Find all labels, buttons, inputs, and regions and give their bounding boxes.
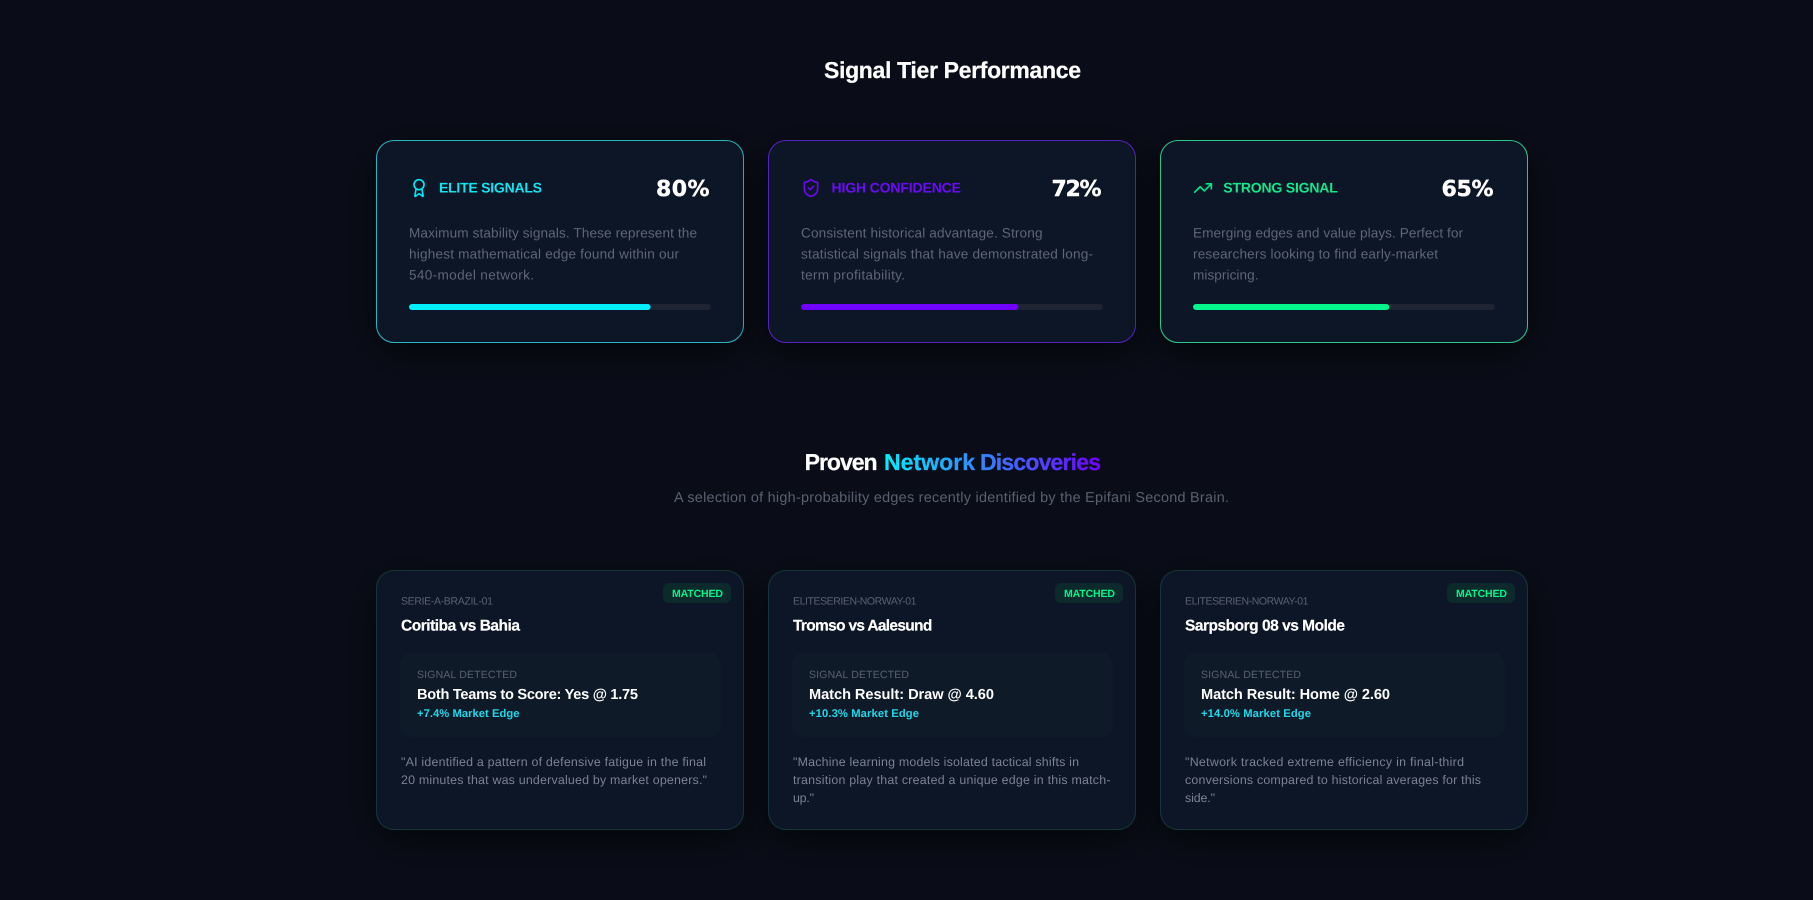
description: term profitability. (801, 267, 905, 282)
badge (1055, 583, 1123, 603)
tier name: STRONG SIGNAL (1223, 180, 1338, 196)
signal box: SIGNAL DETECTED (1201, 669, 1301, 681)
tier name: ELITE SIGNALS (439, 180, 542, 196)
quote: "Network tracked extreme efficiency in final-third (1185, 755, 1464, 769)
signal box (1184, 653, 1505, 737)
panel: strong signal (1160, 140, 1528, 342)
heading: Proven Network Discoveries (805, 449, 1101, 475)
description (1193, 225, 1463, 282)
description: Emerging edges and value plays. Perfect for (1193, 225, 1463, 240)
panel: high confidence (768, 140, 1136, 342)
quote: "AI identified a pattern of defensive fatigue in the final (401, 755, 706, 769)
description (409, 225, 697, 282)
match title: Coritiba vs Bahia (401, 618, 520, 635)
percentage: 65% (1442, 177, 1494, 202)
progress bar 72% (801, 304, 1103, 310)
signal box: Match Result: Home @ 2.60 (1201, 687, 1390, 703)
description: Maximum stability signals. These represent the (409, 225, 697, 240)
progress bar 65% (1193, 304, 1495, 310)
signal box: +7.4% Market Edge (417, 708, 520, 720)
quote (401, 755, 707, 787)
description: statistical signals that have demonstrated long- (801, 246, 1093, 261)
signal box: Both Teams to Score: Yes @ 1.75 (417, 687, 638, 703)
panel: Tromso vs Aalesund (768, 570, 1136, 830)
quote (793, 755, 1110, 805)
league label: SERIE-A-BRAZIL-01 (401, 596, 493, 608)
percentage: 72% (1052, 177, 1102, 202)
quote: conversions compared to historical averages for this (1185, 773, 1481, 787)
description: Consistent historical advantage. Strong (801, 225, 1042, 240)
signal box: SIGNAL DETECTED (809, 669, 909, 681)
league label: ELITESERIEN-NORWAY-01 (1185, 596, 1309, 608)
description: 540-model network. (409, 267, 534, 282)
quote: transition play that created a unique edge in this match- (793, 773, 1110, 787)
quote: side." (1185, 791, 1215, 805)
panel: Sarpsborg 08 vs Molde (1160, 570, 1528, 830)
badge: MATCHED (1064, 588, 1115, 600)
signal box: Match Result: Draw @ 4.60 (809, 687, 994, 703)
signal box (400, 653, 721, 737)
badge: MATCHED (1456, 588, 1507, 600)
league label: ELITESERIEN-NORWAY-01 (793, 596, 917, 608)
quote (1185, 755, 1481, 805)
badge (663, 583, 731, 603)
panel: elite signals (376, 140, 744, 342)
icon: shield check (804, 180, 818, 196)
signal box: +10.3% Market Edge (809, 708, 919, 720)
quote: "Machine learning models isolated tactical shifts in (793, 755, 1079, 769)
quote: 20 minutes that was undervalued by market openers." (401, 773, 707, 787)
signal box: SIGNAL DETECTED (417, 669, 517, 681)
signal box (792, 653, 1113, 737)
match title: Sarpsborg 08 vs Molde (1185, 618, 1345, 635)
icon: trending up (1195, 184, 1211, 192)
description: researchers looking to find early-market (1193, 246, 1438, 261)
progress bar 80% (409, 304, 711, 310)
description: highest mathematical edge found within our (409, 246, 679, 261)
match title: Tromso vs Aalesund (793, 618, 932, 635)
description (801, 225, 1093, 282)
heading: Proven Network Discoveries: Network (884, 449, 975, 475)
heading: Signal Tier Performance: Signal Tier Performance (824, 57, 1081, 83)
panel: Coritiba vs Bahia (376, 570, 744, 830)
heading: Proven Network Discoveries: Proven (805, 449, 878, 475)
icon: award (414, 180, 424, 196)
percentage: 80% (656, 177, 710, 202)
signal box: +14.0% Market Edge (1201, 708, 1311, 720)
description: mispricing. (1193, 267, 1258, 282)
subtitle: A selection of high-probability edges recently identified by the Epifani Second Brain. (674, 490, 1229, 506)
heading: Proven Network Discoveries: Discoveries (980, 449, 1101, 475)
quote: up." (793, 791, 814, 805)
tier name: HIGH CONFIDENCE (832, 180, 961, 196)
badge (1447, 583, 1515, 603)
badge: MATCHED (672, 588, 723, 600)
